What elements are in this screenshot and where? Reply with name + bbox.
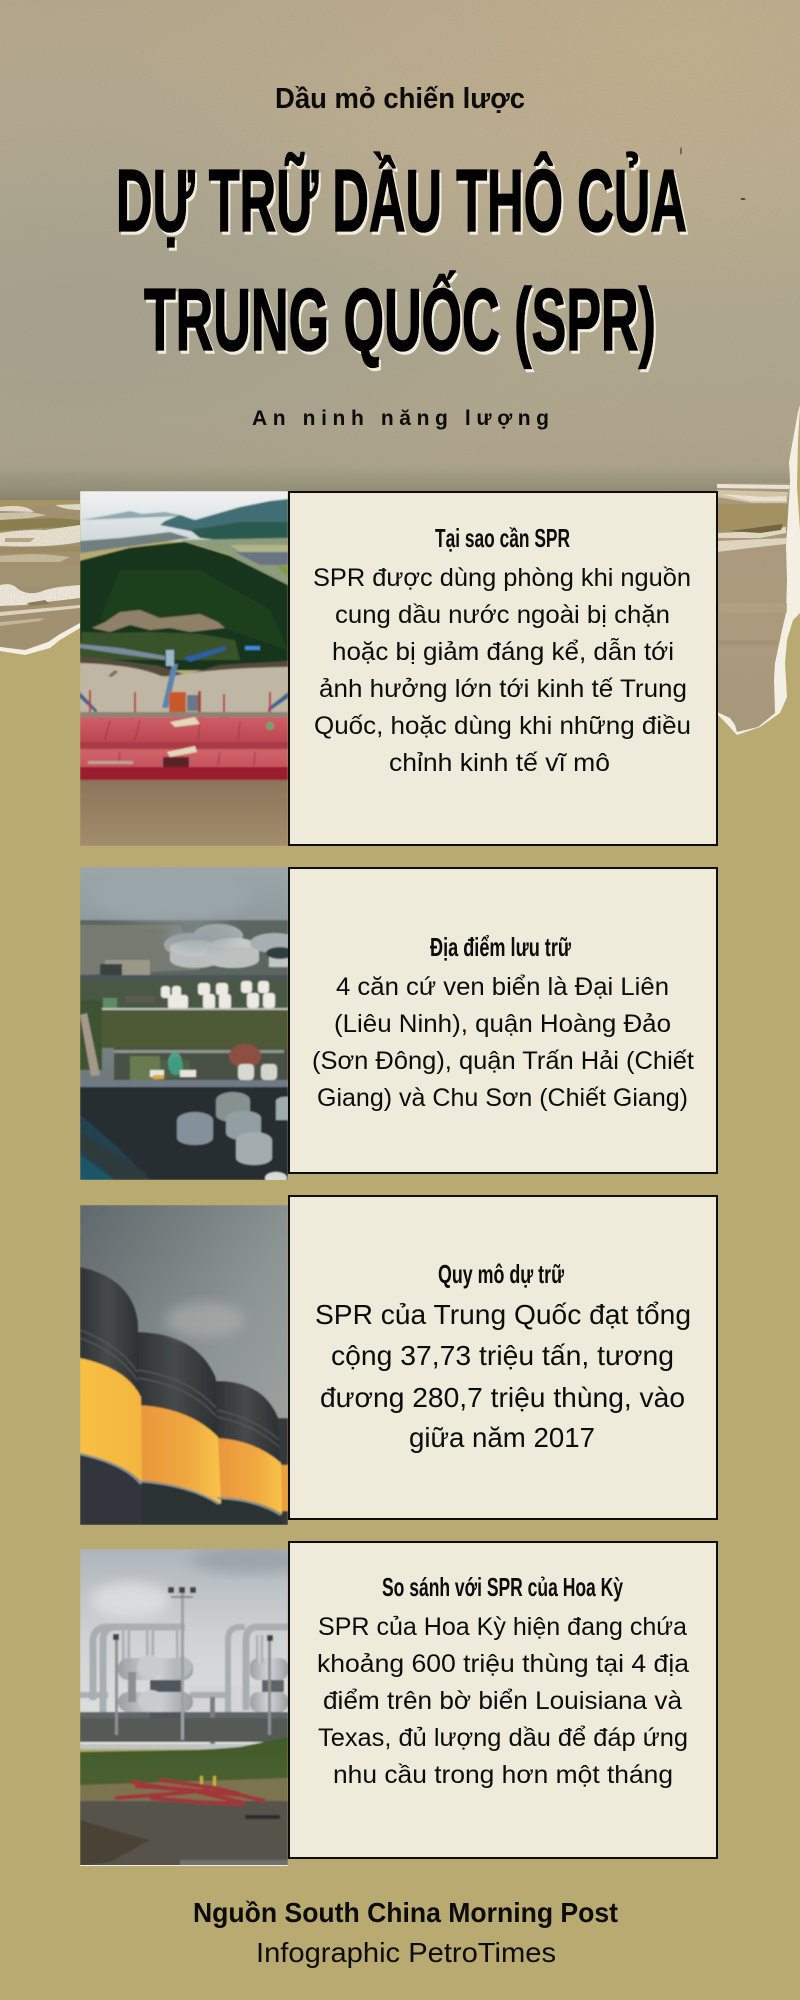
body text: nhu cầu trong hơn một tháng: [333, 1761, 673, 1789]
body text: [312, 973, 694, 1112]
body text: [313, 564, 691, 777]
photo: oil barrels: [80, 1205, 288, 1525]
eyebrow: Dầu mỏ chiến lược: Dầu mỏ chiến lược: [275, 83, 525, 115]
body text: cung dầu nước ngoài bị chặn: [335, 601, 670, 629]
body text: điểm trên bờ biển Louisiana và: [323, 1687, 682, 1715]
body text: đương 280,7 triệu thùng, vào: [320, 1382, 685, 1413]
text box: [289, 1542, 717, 1858]
panel 2: Địa điểm lưu trữ: [80, 867, 717, 1184]
body text: SPR của Trung Quốc đạt tổng: [315, 1299, 691, 1330]
body text: Quốc, hoặc dùng khi những điều: [314, 712, 691, 740]
torn paper background: left sea strip: [0, 498, 80, 655]
title: [116, 151, 687, 369]
body text: giữa năm 2017: [409, 1422, 595, 1453]
text box: [289, 1196, 717, 1519]
torn paper background: right edge: [717, 400, 800, 735]
panel 3: Quy mô dự trữ: [80, 1196, 717, 1525]
body text: khoảng 600 triệu thùng tại 4 địa: [317, 1650, 689, 1678]
footer source: [193, 1897, 618, 1968]
heading: Địa điểm lưu trữ: [430, 932, 571, 962]
panel 1: Tại sao cần SPR: [80, 491, 717, 846]
body text: SPR được dùng phòng khi nguồn: [313, 564, 691, 592]
photo: aerial view of storage tanks: [80, 867, 300, 1184]
body text: [315, 1299, 691, 1453]
body text: ảnh hưởng lớn tới kinh tế Trung: [319, 675, 687, 703]
body text: [317, 1613, 689, 1789]
heading: Tại sao cần SPR: [435, 523, 570, 553]
body text: (Liêu Ninh), quận Hoàng Đảo: [334, 1010, 671, 1038]
photo: oil tanker at terminal: [80, 491, 288, 846]
subtitle: An ninh năng lượng: An ninh năng lượng: [252, 407, 549, 430]
body text: (Sơn Đông), quận Trấn Hải (Chiết: [312, 1047, 694, 1075]
body text: cộng 37,73 triệu tấn, tương: [331, 1340, 674, 1371]
heading: So sánh với SPR của Hoa Kỳ: [382, 1572, 623, 1602]
footer source: Infographic PetroTimes: [256, 1937, 556, 1968]
paper background top: [0, 0, 800, 500]
panel 4: So sánh với SPR của Hoa Kỳ: [80, 1542, 717, 1866]
text box: [289, 868, 717, 1173]
body text: Giang) và Chu Sơn (Chiết Giang): [317, 1084, 688, 1112]
body text: SPR của Hoa Kỳ hiện đang chứa: [318, 1613, 687, 1641]
body text: Texas, đủ lượng dầu để đáp ứng: [318, 1724, 688, 1752]
photo: SPR pipes and plant: [80, 1549, 288, 1866]
footer source: Nguồn South China Morning Post: [193, 1897, 618, 1928]
body text: chỉnh kinh tế vĩ mô: [389, 749, 610, 777]
heading: Quy mô dự trữ: [438, 1259, 564, 1289]
text box: [289, 492, 717, 845]
body text: hoặc bị giảm đáng kể, dẫn tới: [332, 637, 674, 666]
body text: 4 căn cứ ven biển là Đại Liên: [336, 973, 669, 1001]
